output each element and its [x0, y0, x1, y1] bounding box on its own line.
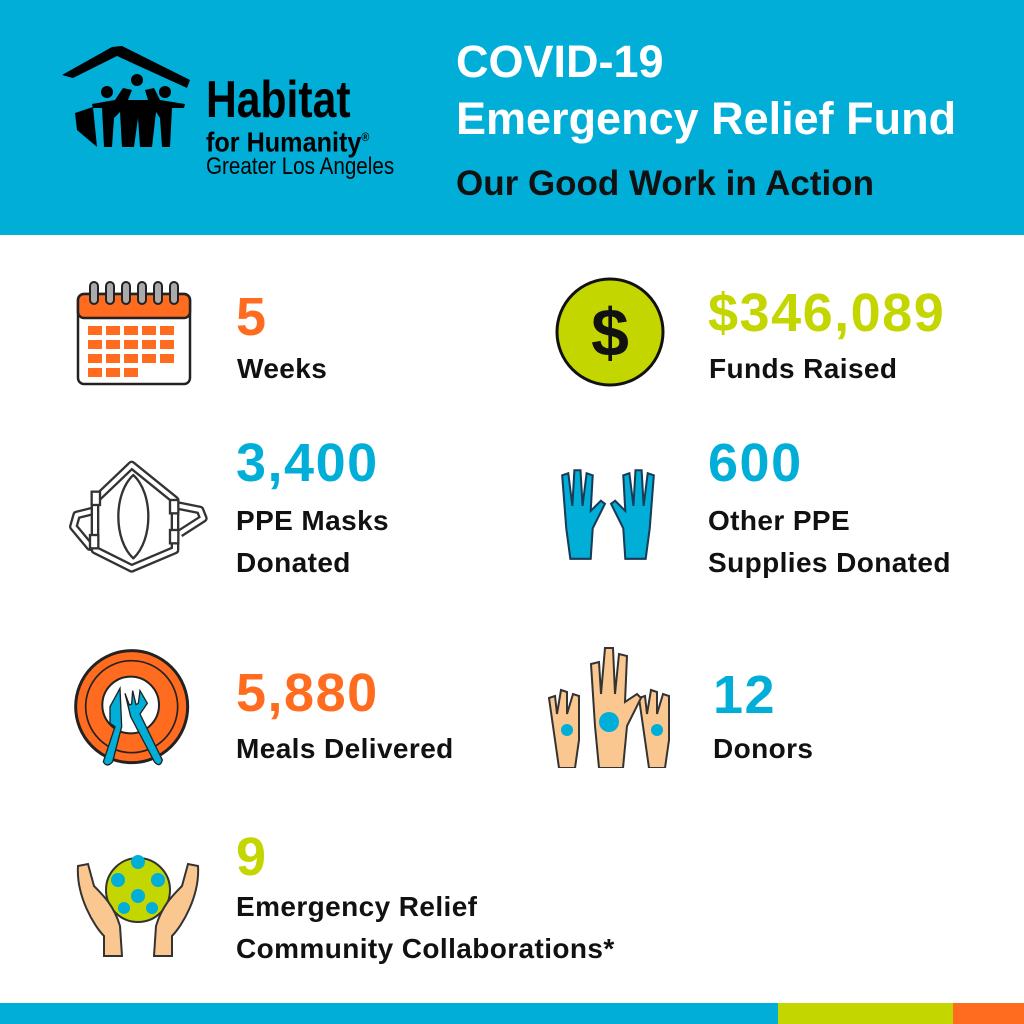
icon: calendar	[76, 281, 192, 386]
stat: meals: Meals Delivered	[236, 733, 454, 764]
stat: weeks: 5	[236, 287, 268, 347]
logo	[62, 46, 394, 180]
stat: donors: 12	[713, 665, 776, 725]
icon: mask	[69, 460, 208, 573]
stat: collaborations: 9	[236, 827, 268, 887]
title: Emergency Relief Fund	[456, 93, 956, 144]
stat: collaborations: Emergency Relief	[236, 891, 477, 922]
stat: meals	[74, 649, 454, 766]
stat: gloves: Other PPE	[708, 505, 850, 536]
logo: for Humanity®	[206, 126, 369, 157]
icon: hands holding globe	[76, 855, 200, 957]
stat: meals: 5,880	[236, 663, 379, 723]
stat: masks: 3,400	[236, 433, 379, 493]
header band	[0, 0, 1024, 235]
stat: funds	[556, 278, 945, 386]
logo: Habitat	[206, 71, 351, 129]
stat: masks: Donated	[236, 547, 351, 578]
stat: donors	[548, 647, 813, 768]
icon: gloves	[561, 469, 655, 560]
icon: dollar coin: $	[591, 295, 629, 371]
stat: funds: $346,089	[708, 283, 945, 343]
title: COVID-19	[456, 36, 664, 87]
stat: weeks	[76, 281, 327, 386]
stat: weeks: Weeks	[237, 353, 327, 384]
logo: Greater Los Angeles	[206, 153, 394, 180]
stat: collaborations: Community Collaborations*	[236, 933, 615, 964]
icon: plate	[74, 649, 190, 766]
icon: raised hands	[548, 647, 670, 768]
title	[456, 36, 956, 144]
icon: dollar coin	[556, 278, 664, 386]
subtitle: Our Good Work in Action	[456, 164, 874, 203]
footer color bar	[0, 1003, 1024, 1024]
stat: masks	[69, 433, 389, 578]
stat: gloves	[561, 433, 951, 578]
icon: habitat house and people	[62, 46, 190, 147]
stat: masks: PPE Masks	[236, 505, 389, 536]
stat: collaborations	[76, 827, 615, 964]
stat: gloves: 600	[708, 433, 803, 493]
stat: gloves: Supplies Donated	[708, 547, 951, 578]
stat: funds: Funds Raised	[709, 353, 897, 384]
stat: donors: Donors	[713, 733, 813, 764]
